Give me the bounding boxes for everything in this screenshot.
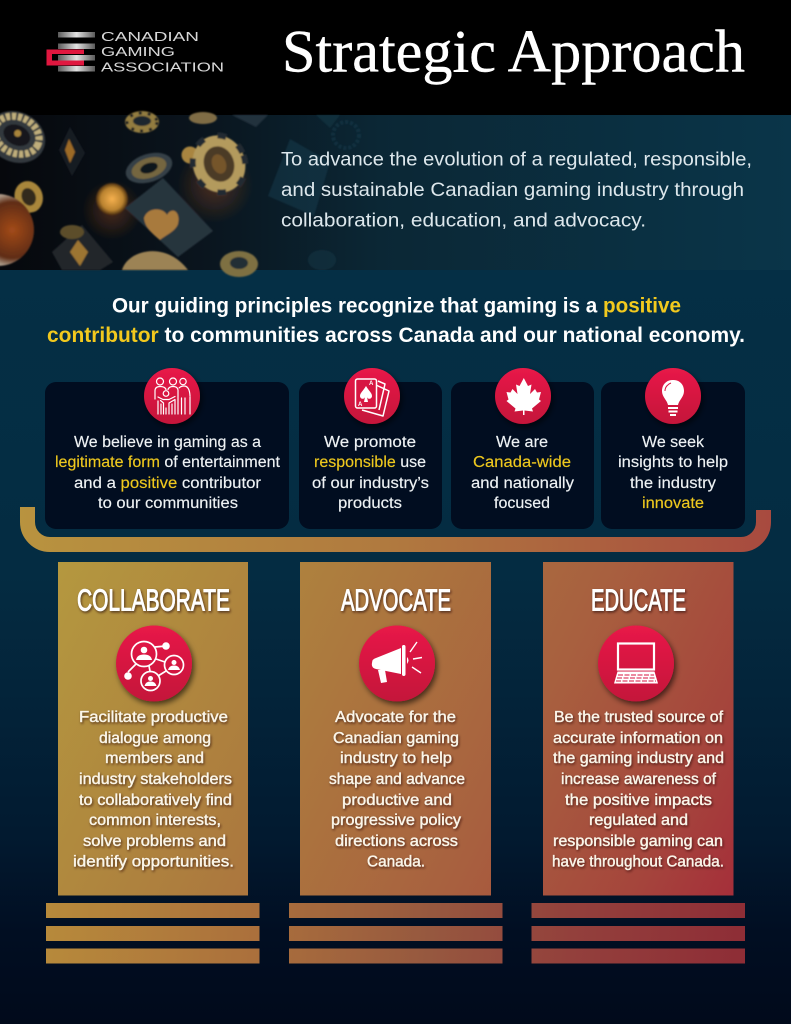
stacked bars: base of pillars [46, 903, 745, 964]
icon: playing cards [344, 368, 400, 424]
card text: We promote [324, 434, 416, 451]
card text: focused [494, 495, 550, 512]
body text: identify opportunities. [73, 854, 234, 870]
card text [471, 434, 574, 512]
body text [329, 709, 465, 870]
body text: productive and [342, 792, 452, 809]
card text: legitimate form of entertainment [55, 454, 281, 471]
body text: solve problems and [83, 833, 226, 850]
guiding principles heading: Our guiding principles recognize that gaming is a positive [112, 294, 681, 318]
body text: members and [105, 750, 204, 767]
icon: playing cards: A [369, 381, 374, 387]
card text: the industry [630, 475, 716, 492]
mission statement: and sustainable Canadian gaming industry through [281, 179, 744, 201]
body text: Advocate for the [335, 709, 456, 726]
card text: to our communities [98, 495, 238, 512]
card text: of our industry’s [312, 475, 429, 492]
body text: the positive impacts [565, 792, 712, 809]
body text: accurate information on [553, 730, 723, 747]
body text: industry stakeholders [79, 771, 232, 788]
card text: products [338, 495, 402, 512]
heading: COLLABORATE [77, 582, 230, 618]
logo: Canadian Gaming Association: CANADIAN [101, 30, 199, 44]
icon: light bulb [645, 368, 701, 424]
panel: advocate [300, 562, 491, 896]
heading: EDUCATE [591, 582, 686, 618]
body text: have throughout Canada. [552, 854, 724, 870]
card text: responsible use [314, 454, 426, 471]
card text: Canada-wide [473, 454, 571, 471]
body text: industry to help [340, 750, 452, 767]
body text: directions across [335, 833, 458, 850]
panel: educate [543, 562, 734, 896]
header band [0, 0, 791, 115]
body text: common interests, [89, 812, 221, 829]
card text: insights to help [618, 454, 728, 471]
principle card: Canada-wide [451, 368, 594, 529]
body text: responsible gaming can [553, 833, 723, 850]
card text: We are [496, 434, 548, 451]
card text: and a positive contributor [74, 475, 261, 492]
roulette wheel [0, 102, 54, 172]
heading: ADVOCATE [341, 582, 451, 618]
icon: laptop [598, 626, 674, 702]
body text: Canadian gaming [333, 730, 459, 747]
body text: Canada. [367, 854, 425, 870]
body text: progressive policy [331, 812, 461, 829]
body text: Facilitate productive [79, 709, 228, 726]
panel: collaborate [58, 562, 248, 896]
card text: and nationally [471, 475, 574, 492]
icon: family [144, 368, 200, 424]
mission statement: collaboration, education, and advocacy. [281, 210, 646, 232]
card text [55, 434, 281, 512]
bracket connector [28, 507, 764, 544]
body text: Be the trusted source of [554, 709, 724, 726]
banner with casino imagery [0, 102, 791, 277]
card text: innovate [642, 495, 704, 512]
body text: to collaboratively find [79, 792, 232, 809]
guiding principles heading [47, 294, 745, 347]
body text [552, 709, 724, 870]
body text: increase awareness of [561, 771, 717, 788]
body text: regulated and [589, 812, 688, 829]
guiding principles heading: contributor to communities across Canada and our national economy. [47, 324, 745, 347]
title: Strategic Approach [282, 18, 745, 84]
body text: shape and advance [329, 771, 465, 788]
body text: dialogue among [99, 730, 211, 747]
body text [73, 709, 234, 870]
card text: We seek [642, 434, 704, 451]
mission statement [281, 148, 752, 232]
logo: Canadian Gaming Association: ASSOCIATION [101, 60, 224, 74]
principle card: legitimate entertainment [45, 368, 289, 529]
logo: Canadian Gaming Association: GAMING [101, 45, 175, 59]
body text: the gaming industry and [553, 750, 724, 767]
card text [312, 434, 429, 512]
mission statement: To advance the evolution of a regulated, responsible, [281, 148, 752, 170]
icon: playing cards: A [358, 402, 363, 408]
card text [618, 434, 728, 512]
casino chips and cards illustration [0, 102, 359, 277]
principle card: innovate [601, 368, 745, 529]
icon: megaphone [359, 626, 435, 702]
card text: We believe in gaming as a [74, 434, 261, 451]
logo: Canadian Gaming Association [46, 30, 224, 74]
icon: maple leaf [495, 368, 551, 424]
principle card: responsible use [299, 368, 442, 529]
icon: network of people [116, 626, 192, 702]
